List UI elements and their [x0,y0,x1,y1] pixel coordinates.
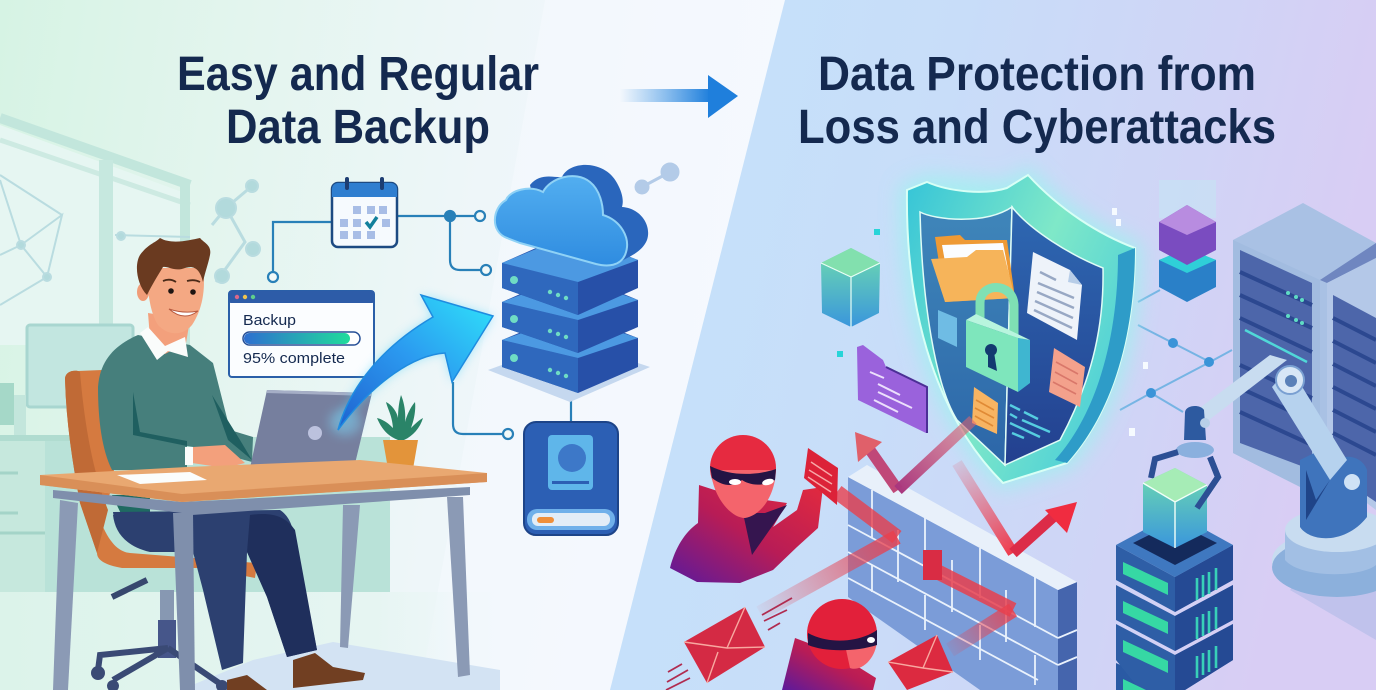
background: diagonal light band [420,0,785,690]
laptop [187,390,372,477]
icon: code lines [1010,405,1050,438]
robot arm [1151,355,1376,640]
red envelopes [666,598,953,690]
green isometric cube [821,248,880,327]
server stack [488,233,650,402]
red attack arrows [760,420,1077,650]
person hand [185,445,245,468]
text: Data Backup [226,101,490,154]
teal sparkle squares [837,229,880,357]
person [98,238,365,690]
backup progress window: 95% complete [243,350,345,367]
arrow between titles [620,75,738,118]
text: Loss and Cyberattacks [798,101,1276,154]
person shoes [227,653,365,690]
white sparkle squares [1112,208,1148,436]
server racks [1233,203,1376,510]
icon: small notes [938,310,1085,434]
person hair [137,238,210,295]
purple and teal cubes [1159,180,1216,302]
shield with protected data [907,175,1135,483]
person thighs [113,510,250,552]
person sweater shading [133,392,252,460]
title: right: Data Protection from [818,48,1256,101]
person neck [148,313,190,354]
big blue arrow [338,295,493,430]
server tower with cube [1116,457,1233,690]
connector lines [268,211,571,439]
person sweater [98,335,253,470]
office window backdrop [0,118,190,345]
person cuff [185,447,193,465]
plant [377,395,423,469]
purple folder [857,345,927,433]
person sweater hem below desk [112,495,150,525]
icon: backup book drive [524,422,618,535]
background: right panel [610,0,1376,690]
person ear [137,283,149,301]
icon: padlock [966,287,1030,392]
person legs [113,510,317,670]
desk [40,460,487,690]
person far leg shade [247,514,317,657]
icon: folder [931,235,1015,302]
person head [147,268,204,333]
person collar [140,327,188,360]
hacker two [782,599,877,690]
icon: cloud [495,165,648,265]
background desk cabinet and wall [0,325,500,690]
small network node [636,164,678,193]
backup progress window: Backup [243,312,296,329]
hacker one [670,435,838,583]
person eyes and smile [163,280,200,316]
network decoration left [0,175,260,305]
title: left: Easy and Regular [177,48,539,101]
backup progress window [229,291,374,377]
icon: document [1027,252,1082,340]
network lines right [1120,290,1232,412]
firewall brick wall [848,465,1077,690]
icon: calendar [332,177,397,247]
chair [65,370,257,690]
